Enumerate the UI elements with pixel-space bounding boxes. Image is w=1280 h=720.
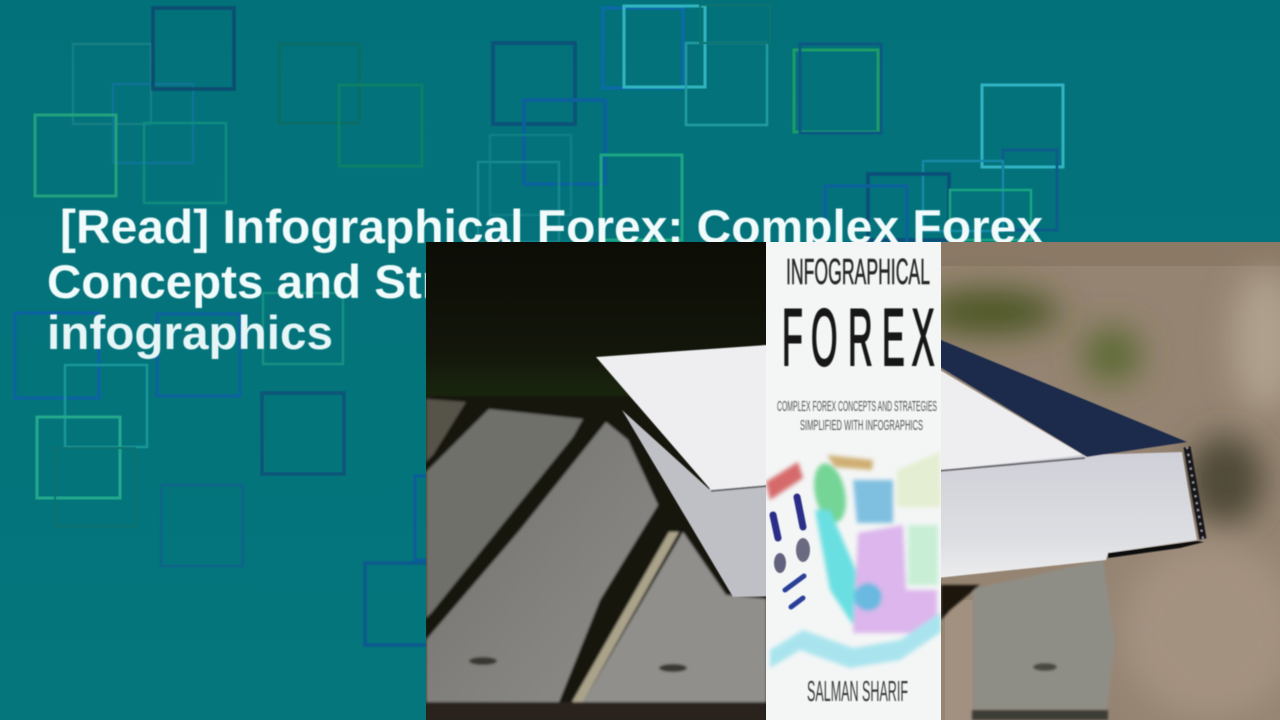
cover artwork xyxy=(766,452,941,668)
cover diagram marks xyxy=(773,497,810,607)
bench planks xyxy=(426,396,1115,720)
title text: [Read] Infographical Forex: Complex Forex xyxy=(60,201,1044,254)
cover title: SALMAN SHARIF xyxy=(807,676,908,708)
cover title: INFOGRAPHICAL xyxy=(786,251,930,292)
book cover overlay xyxy=(766,242,941,720)
decorative outlined squares xyxy=(15,5,1063,645)
title text xyxy=(47,201,1044,360)
cover title: SIMPLIFIED WITH INFOGRAPHICS xyxy=(800,417,923,434)
title text: infographics xyxy=(47,307,333,360)
title text: Concepts and Strategies Simplified with xyxy=(47,256,952,309)
cover title: FOREX xyxy=(782,293,935,383)
book xyxy=(596,323,1204,597)
photo: book on a bench xyxy=(426,242,1280,720)
photo background xyxy=(426,242,1280,720)
text: COMPLEX FOREX CONCEPTS AND STRATEGIES xyxy=(777,398,937,415)
cover title xyxy=(777,251,937,708)
